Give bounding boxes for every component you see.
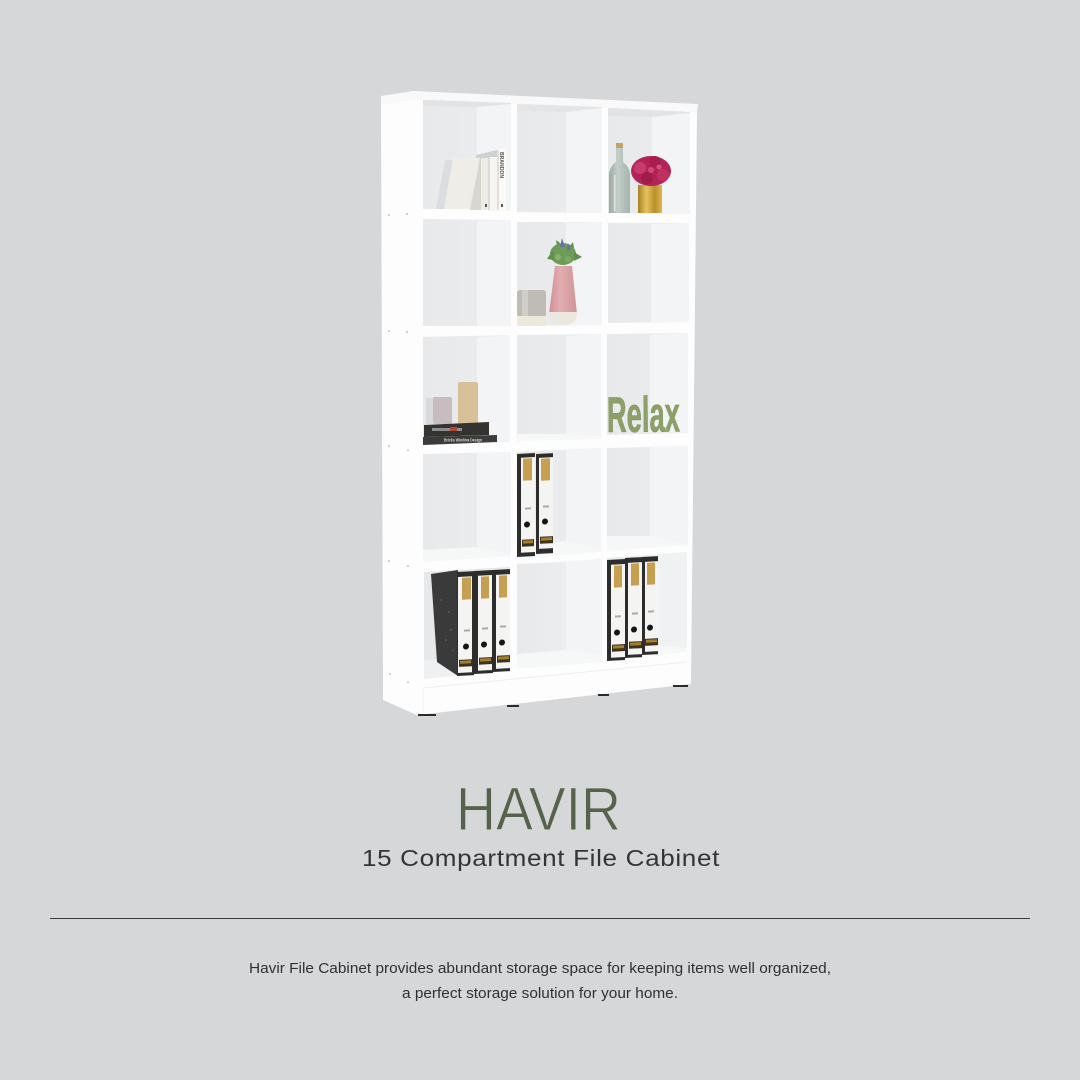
description: Havir File Cabinet provides abundant storage space for keeping items well organized, bbox=[249, 960, 831, 977]
divider bbox=[50, 918, 1030, 920]
binders: bottom left bbox=[431, 569, 510, 676]
binders: bottom right bbox=[607, 556, 658, 661]
relax sign: Relax bbox=[607, 386, 680, 443]
stacked black books bbox=[423, 422, 497, 445]
compartments bbox=[423, 100, 690, 679]
description: a perfect storage solution for your home. bbox=[402, 985, 678, 1002]
jar bbox=[517, 290, 546, 326]
pink vase with plant bbox=[547, 238, 582, 325]
books: top left compartment bbox=[436, 149, 506, 211]
description bbox=[249, 960, 831, 1002]
title: HAVIR bbox=[456, 775, 621, 843]
candles bbox=[426, 382, 478, 424]
binders: middle row bbox=[517, 453, 553, 557]
stacked black books: Bricks Window Design bbox=[444, 438, 482, 442]
subtitle: 15 Compartment File Cabinet bbox=[362, 845, 720, 871]
side panel screw holes bbox=[388, 213, 409, 683]
cabinet bbox=[381, 91, 698, 716]
gold vase with flowers bbox=[631, 156, 671, 213]
books: top left compartment: BRANDON bbox=[498, 152, 504, 178]
cabinet body bbox=[381, 91, 698, 715]
feet bbox=[418, 685, 688, 716]
bottle bbox=[609, 143, 630, 213]
